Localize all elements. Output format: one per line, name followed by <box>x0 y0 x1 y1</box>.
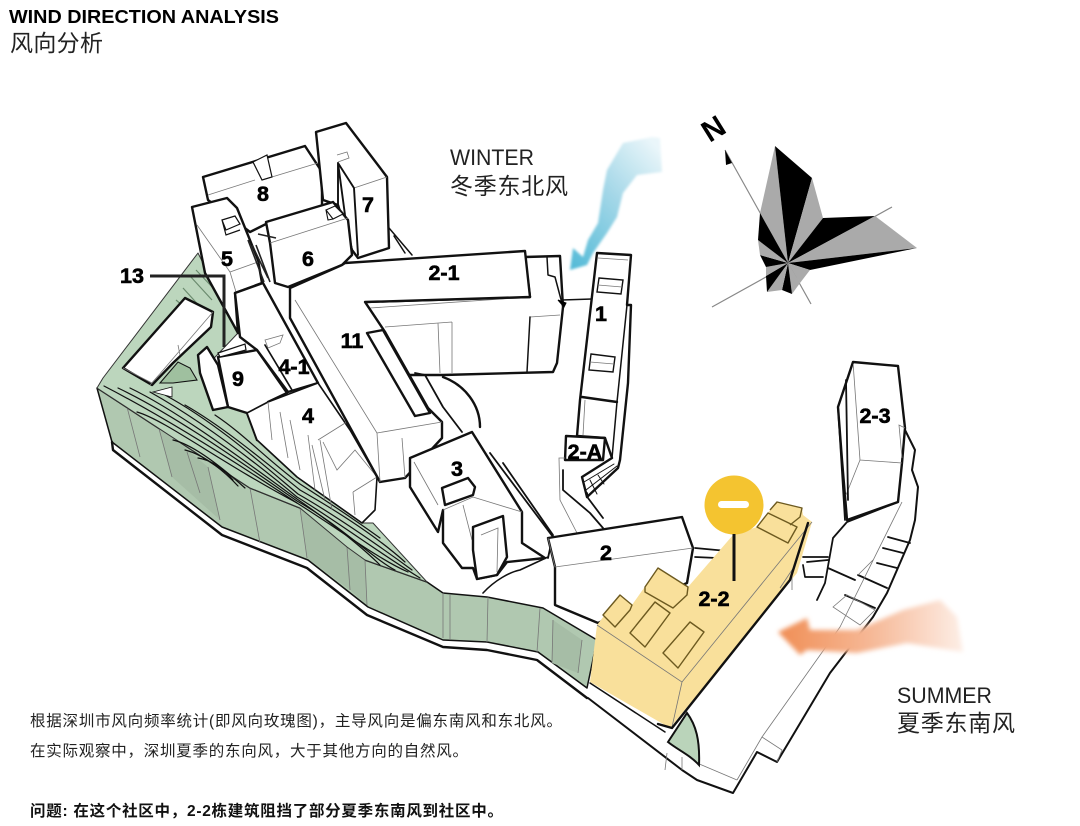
compass axes <box>712 150 892 307</box>
winter label: WINTER <box>450 145 534 170</box>
building 5 <box>192 198 276 333</box>
description text <box>30 712 562 760</box>
building number labels: 8 <box>257 182 269 206</box>
wind rose compass <box>696 110 917 307</box>
building number labels: 2-2 <box>698 587 730 611</box>
summer wind arrow <box>778 600 963 655</box>
green slope wall <box>97 388 597 698</box>
rose petals <box>758 146 917 294</box>
building number labels: 13 <box>120 264 144 288</box>
site plan <box>97 123 918 793</box>
winter label <box>450 145 568 199</box>
small back lot lines <box>389 228 592 300</box>
building number labels: 11 <box>341 329 363 353</box>
building number labels <box>120 182 891 611</box>
title: WIND DIRECTION ANALYSIS <box>9 6 279 27</box>
summer label: 夏季东南风 <box>897 710 1015 736</box>
building 2-A <box>559 436 605 533</box>
building number labels: 2-3 <box>859 404 891 428</box>
building 11 and 2-1 roof <box>290 251 530 482</box>
building 4 <box>247 383 377 523</box>
building number labels: 1 <box>595 302 607 326</box>
building 2 <box>548 517 693 623</box>
green corner patch <box>668 713 699 765</box>
green upper terrain <box>97 253 427 582</box>
description text: 在实际观察中，深圳夏季的东向风，大于其他方向的自然风。 <box>30 742 468 760</box>
building number labels: 2 <box>600 541 612 565</box>
bridges <box>695 548 828 577</box>
building number labels: 3 <box>451 457 463 481</box>
building number labels: 4-1 <box>278 355 310 379</box>
east road edge <box>588 430 918 793</box>
building 3 <box>410 432 553 593</box>
building number labels: 6 <box>302 247 314 271</box>
building number labels: 5 <box>221 247 233 271</box>
building 9 <box>198 344 287 440</box>
circular plaza arc <box>443 377 480 427</box>
title: 风向分析 <box>10 30 103 56</box>
building 2-3 <box>838 362 905 520</box>
building 7 <box>316 123 389 258</box>
building number labels: 2-A <box>568 440 602 464</box>
description text: 根据深圳市风向频率统计(即风向玫瑰图)，主导风向是偏东南风和东北风。 <box>30 712 562 730</box>
summer label <box>897 683 1015 736</box>
winter wind arrow <box>570 137 662 270</box>
building 1 <box>577 253 631 497</box>
building number labels: 4 <box>302 404 314 428</box>
building 2-2 highlighted <box>590 502 812 732</box>
title <box>9 6 279 56</box>
problem statement: 问题: 在这个社区中，2-2栋建筑阻挡了部分夏季东南风到社区中。 <box>30 801 503 820</box>
summer label: SUMMER <box>897 683 992 708</box>
building 6 <box>266 202 352 287</box>
building 8 <box>203 146 322 232</box>
building 4-1 <box>235 283 318 392</box>
north arrow <box>725 150 732 165</box>
winter label: 冬季东北风 <box>450 173 568 199</box>
north letter: N <box>696 110 732 149</box>
minus marker for building 2-2 <box>704 476 764 581</box>
building 13 leader line <box>150 276 224 347</box>
building number labels: 2-1 <box>428 261 460 285</box>
building number labels: 9 <box>232 367 244 391</box>
building number labels: 7 <box>362 193 374 217</box>
building 13 <box>123 298 213 397</box>
building 2-1 <box>365 256 566 375</box>
